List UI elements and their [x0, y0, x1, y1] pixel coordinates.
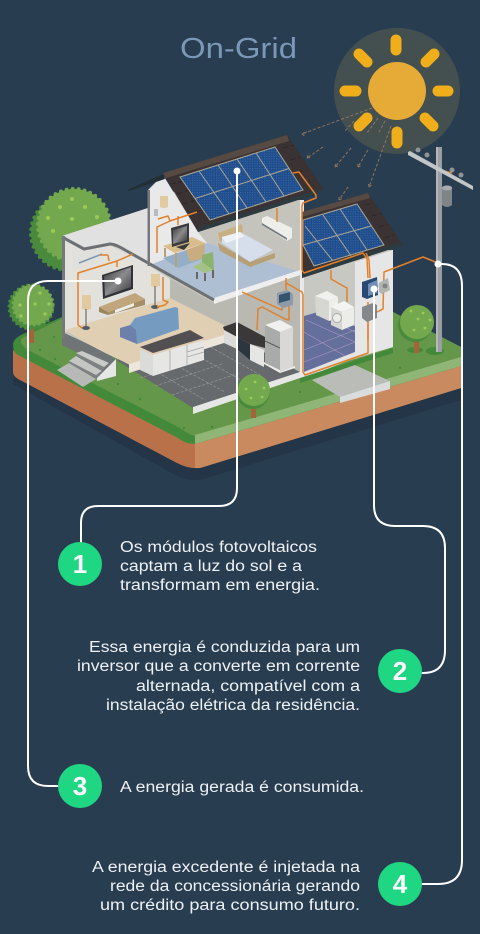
air conditioner left [73, 248, 104, 268]
air conditioner upper [262, 216, 292, 241]
house: entry landing and steps [57, 332, 116, 387]
step 2 text: alternada, compatível com a [136, 678, 360, 695]
badge 4: 4 [393, 869, 408, 899]
badge 2: 2 [393, 656, 407, 686]
connector 4 [415, 260, 462, 884]
bedroom furniture [154, 196, 292, 281]
tv stand [99, 293, 145, 315]
house: living room floor lip [129, 335, 224, 373]
concrete path [312, 365, 390, 403]
badge 1 [58, 542, 102, 586]
arrows: sunlight rays [302, 108, 391, 200]
house: bedroom wall left [148, 175, 207, 265]
tree: front [236, 374, 270, 418]
step 4 text: A energia excedente é injetada na [92, 859, 360, 876]
meter [379, 278, 390, 294]
green chair [193, 252, 214, 281]
connector 3 [28, 278, 122, 786]
tree: right [398, 305, 434, 353]
house: bedroom floor [150, 243, 300, 300]
house: body backing [62, 190, 393, 376]
bed [218, 224, 275, 267]
lamp left [82, 295, 91, 330]
dryer [315, 291, 338, 321]
living room furniture [73, 248, 204, 376]
badge 3 [58, 764, 102, 808]
step 1 text [120, 539, 320, 594]
platform base [13, 300, 461, 480]
electrical boxes [277, 277, 390, 322]
house: right part walls [300, 200, 393, 383]
breaker box [362, 303, 377, 322]
lamp upper [154, 196, 168, 216]
house: wall corner posts [62, 190, 150, 338]
small solar panels [303, 204, 384, 266]
step 2 text: Essa energia é conduzida para um [89, 639, 360, 656]
badge 2 [378, 649, 422, 693]
step 4 text: um crédito para consumo futuro. [100, 897, 360, 914]
kitchen appliances [223, 320, 295, 373]
laundry machines [315, 291, 354, 330]
inverter panel kitchen [277, 290, 293, 308]
house: patio [116, 330, 300, 414]
main solar panels [180, 147, 303, 220]
small roof [302, 193, 403, 278]
house: kitchen back wall [170, 275, 300, 372]
house: cut line [62, 237, 214, 300]
sofa [120, 307, 179, 344]
step 3 text: A energia gerada é consumida. [120, 779, 364, 796]
house: floor slab edge [214, 270, 300, 304]
utility pole [408, 147, 473, 355]
refrigerator [264, 320, 295, 373]
house: bedroom wall right [198, 200, 300, 272]
house: living room floor [65, 298, 224, 365]
connector 2 [370, 286, 445, 673]
inverter [362, 277, 378, 299]
tree: large left [31, 189, 110, 270]
badge 4 [378, 862, 422, 906]
connector 1 [81, 168, 240, 545]
step 2 text [77, 639, 360, 714]
washer [331, 301, 354, 330]
step 2 text: inversor que a converte em corrente [77, 658, 360, 675]
kitchen island [140, 330, 204, 376]
step 1 text: Os módulos fotovoltaicos [120, 539, 317, 556]
step 2 text: instalação elétrica da residência. [106, 697, 360, 714]
step 4 text: rede da concessionária gerando [110, 878, 360, 895]
badge 1: 1 [73, 549, 87, 579]
title: On-Grid [180, 33, 297, 65]
lamp right [151, 274, 160, 309]
tree: small left [9, 285, 53, 343]
kitchen counter [223, 322, 265, 367]
badge 3: 3 [73, 771, 87, 801]
house: upper outer wall [62, 208, 148, 266]
main roof [127, 135, 323, 232]
step 1 text: captam a luz do sol e a [120, 558, 302, 575]
icon: sun [334, 28, 460, 154]
house: living room wall [62, 238, 170, 338]
step 1 text: transformam em energia. [120, 577, 320, 594]
desk and monitor [163, 223, 205, 267]
orange wiring [78, 169, 452, 375]
television [102, 265, 133, 299]
step 4 text [92, 859, 360, 914]
